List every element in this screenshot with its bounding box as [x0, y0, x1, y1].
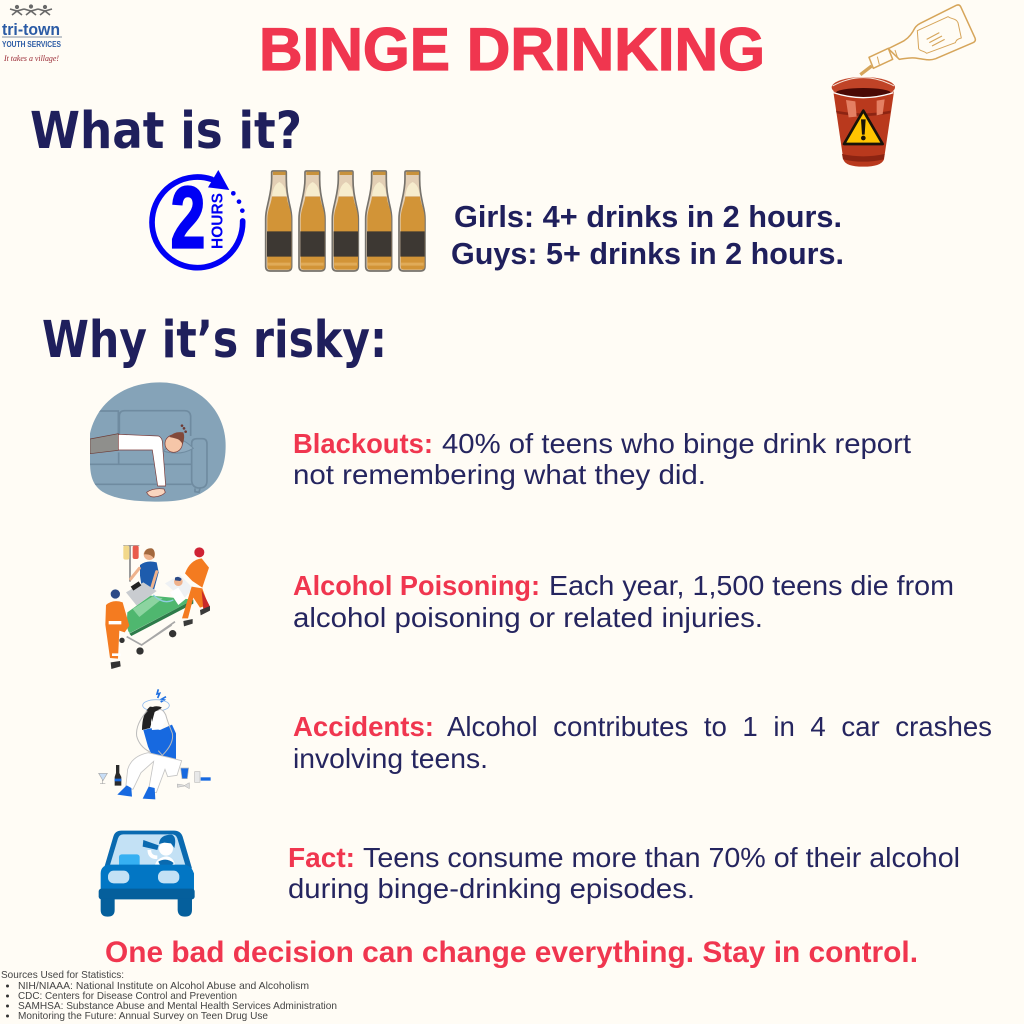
fact: during binge-drinking episodes.: [288, 873, 695, 904]
hours label: HOURS: [209, 193, 226, 249]
sources heading: Sources Used for Statistics:: [1, 969, 124, 981]
source items: CDC: Centers for Disease Control and Prevention: [18, 990, 237, 1002]
source items: SAMHSA: Substance Abuse and Mental Health Services Administration: [18, 1000, 337, 1012]
risk: alcohol poisoning: [293, 570, 954, 633]
closing message: One bad decision can change everything. Stay in control.: [105, 936, 918, 969]
icon: bottle pouring into red cup with warning sign: [832, 5, 975, 167]
risk: blackouts: [293, 428, 911, 490]
car roof and windshield: [104, 831, 192, 868]
icon: dizzy person sitting with drinks: [99, 689, 211, 799]
bottle: [115, 765, 121, 786]
guys definition: Guys: 5+ drinks in 2 hours.: [451, 236, 844, 271]
stretcher: [127, 596, 193, 633]
paramedic right: [194, 547, 204, 557]
icon: two hours clock arrow: [152, 168, 245, 268]
logo: tri-town youth services: [2, 5, 62, 63]
fact text: Teens consume more than 70% of their alcohol: [363, 842, 960, 873]
definition text: [451, 199, 844, 271]
icon: bottle: [860, 5, 975, 75]
number 2: 2: [171, 168, 205, 266]
source items: Monitoring the Future: Annual Survey on Teen Drug Use: [18, 1010, 268, 1022]
car body: [101, 865, 194, 890]
figure: [142, 707, 161, 730]
alcohol poisoning text: Each year, 1,500 teens die from: [549, 570, 954, 601]
blackouts text: 40% of teens who binge drink report: [442, 428, 911, 459]
monitor: [126, 582, 157, 606]
logo wordmark: tri-town: [2, 20, 60, 39]
dizzy marks: [157, 689, 166, 702]
icon: warning triangle: [844, 111, 883, 144]
paramedic left: [111, 589, 120, 599]
nurse: [144, 549, 155, 560]
glasses: [99, 773, 107, 784]
accidents text: Alcohol contributes to 1 in 4 car crashes: [447, 711, 992, 742]
patient: [165, 575, 193, 599]
fact label: Fact:: [288, 842, 355, 873]
risk: accidents: [293, 711, 992, 774]
accidents label: Accidents:: [293, 711, 434, 742]
blackouts label: Blackouts:: [293, 428, 433, 459]
logo subtitle: YOUTH SERVICES: [2, 40, 62, 49]
icon: person drinking while driving a blue car: [99, 831, 195, 917]
alcohol poisoning label: Alcohol Poisoning:: [293, 570, 540, 601]
driver: [155, 856, 175, 865]
heading: what is it: What is it?: [30, 102, 302, 161]
icon: person passed out on sofa: [90, 382, 226, 502]
icon: five beer bottles: [266, 171, 425, 271]
icon: paramedics with stretcher: [105, 545, 210, 669]
girls definition: Girls: 4+ drinks in 2 hours.: [454, 199, 842, 234]
risk: blackouts: not remembering what they did.: [293, 459, 706, 490]
source items: [6, 980, 337, 1022]
heading: why it's risky: Why it’s risky:: [42, 311, 387, 370]
source items: NIH/NIAAA: National Institute on Alcohol Abuse and Alcoholism: [18, 980, 309, 992]
logo tagline: It takes a village!: [3, 54, 59, 63]
title: BINGE DRINKING: [259, 16, 765, 83]
icon: three people: [10, 5, 52, 15]
icon: red cup: [832, 77, 895, 167]
risk: accidents: involving teens.: [293, 743, 488, 774]
risk: alcohol poisoning: alcohol poisoning or related injuries.: [293, 602, 763, 633]
iv stand: [127, 545, 133, 582]
sources list: [1, 969, 337, 1022]
fact: [288, 842, 960, 904]
